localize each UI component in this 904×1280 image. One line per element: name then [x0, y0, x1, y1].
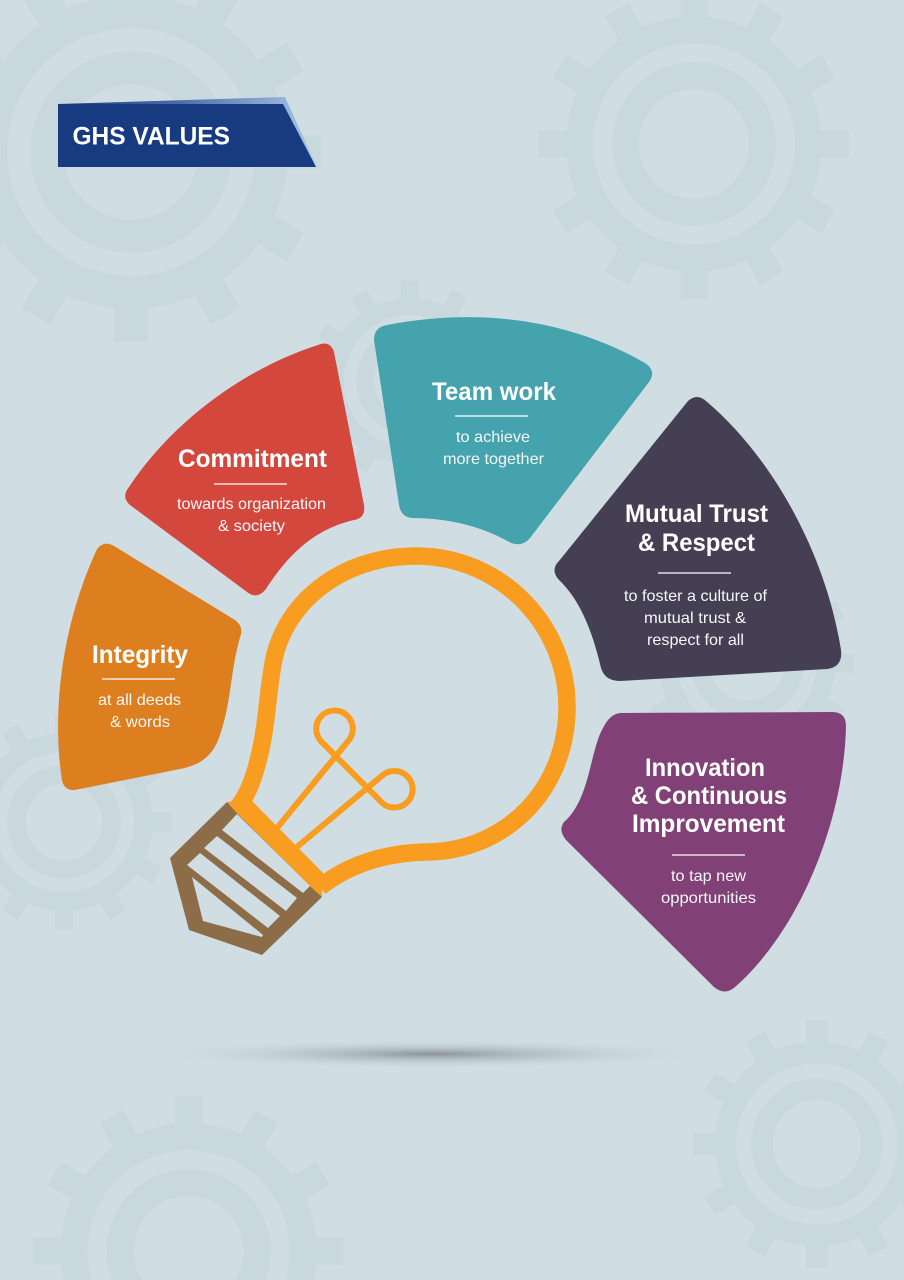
- panel: integrity: at all deeds: [98, 692, 181, 709]
- panel: mutual trust and respect: [554, 397, 841, 681]
- panel: innovation and continuous improvement: [561, 712, 846, 992]
- ground shadow: [147, 1039, 717, 1069]
- panel: mutual trust and respect: mutual trust &: [644, 610, 746, 627]
- panel: mutual trust and respect: respect for all: [647, 632, 744, 649]
- icon: light bulb: [170, 556, 567, 955]
- panel: integrity: Integrity: [92, 641, 188, 669]
- panel: innovation and continuous improvement: & Continuous: [631, 782, 787, 810]
- panel: mutual trust and respect: to foster a culture of: [624, 588, 768, 605]
- panel: team work: [374, 317, 652, 544]
- title banner: GHS VALUES: [72, 122, 230, 150]
- panel: commitment: towards organization: [177, 496, 326, 513]
- panel: innovation and continuous improvement: Innovation: [645, 754, 765, 782]
- panel: commitment: & society: [218, 518, 285, 535]
- panel: commitment: [125, 344, 364, 595]
- title banner: [58, 97, 316, 167]
- panel: commitment: Commitment: [178, 445, 328, 473]
- panel: innovation and continuous improvement: Improvement: [632, 810, 786, 838]
- panel: team work: more together: [443, 451, 545, 468]
- panel: mutual trust and respect: Mutual Trust: [625, 500, 769, 528]
- panel: mutual trust and respect: & Respect: [638, 529, 756, 557]
- panel: innovation and continuous improvement: opportunities: [661, 890, 756, 907]
- panel: team work: to achieve: [456, 429, 530, 446]
- panel: team work: Team work: [432, 378, 556, 406]
- panel: integrity: & words: [110, 714, 170, 731]
- panel: integrity: [58, 544, 241, 790]
- panel: innovation and continuous improvement: to tap new: [671, 868, 746, 885]
